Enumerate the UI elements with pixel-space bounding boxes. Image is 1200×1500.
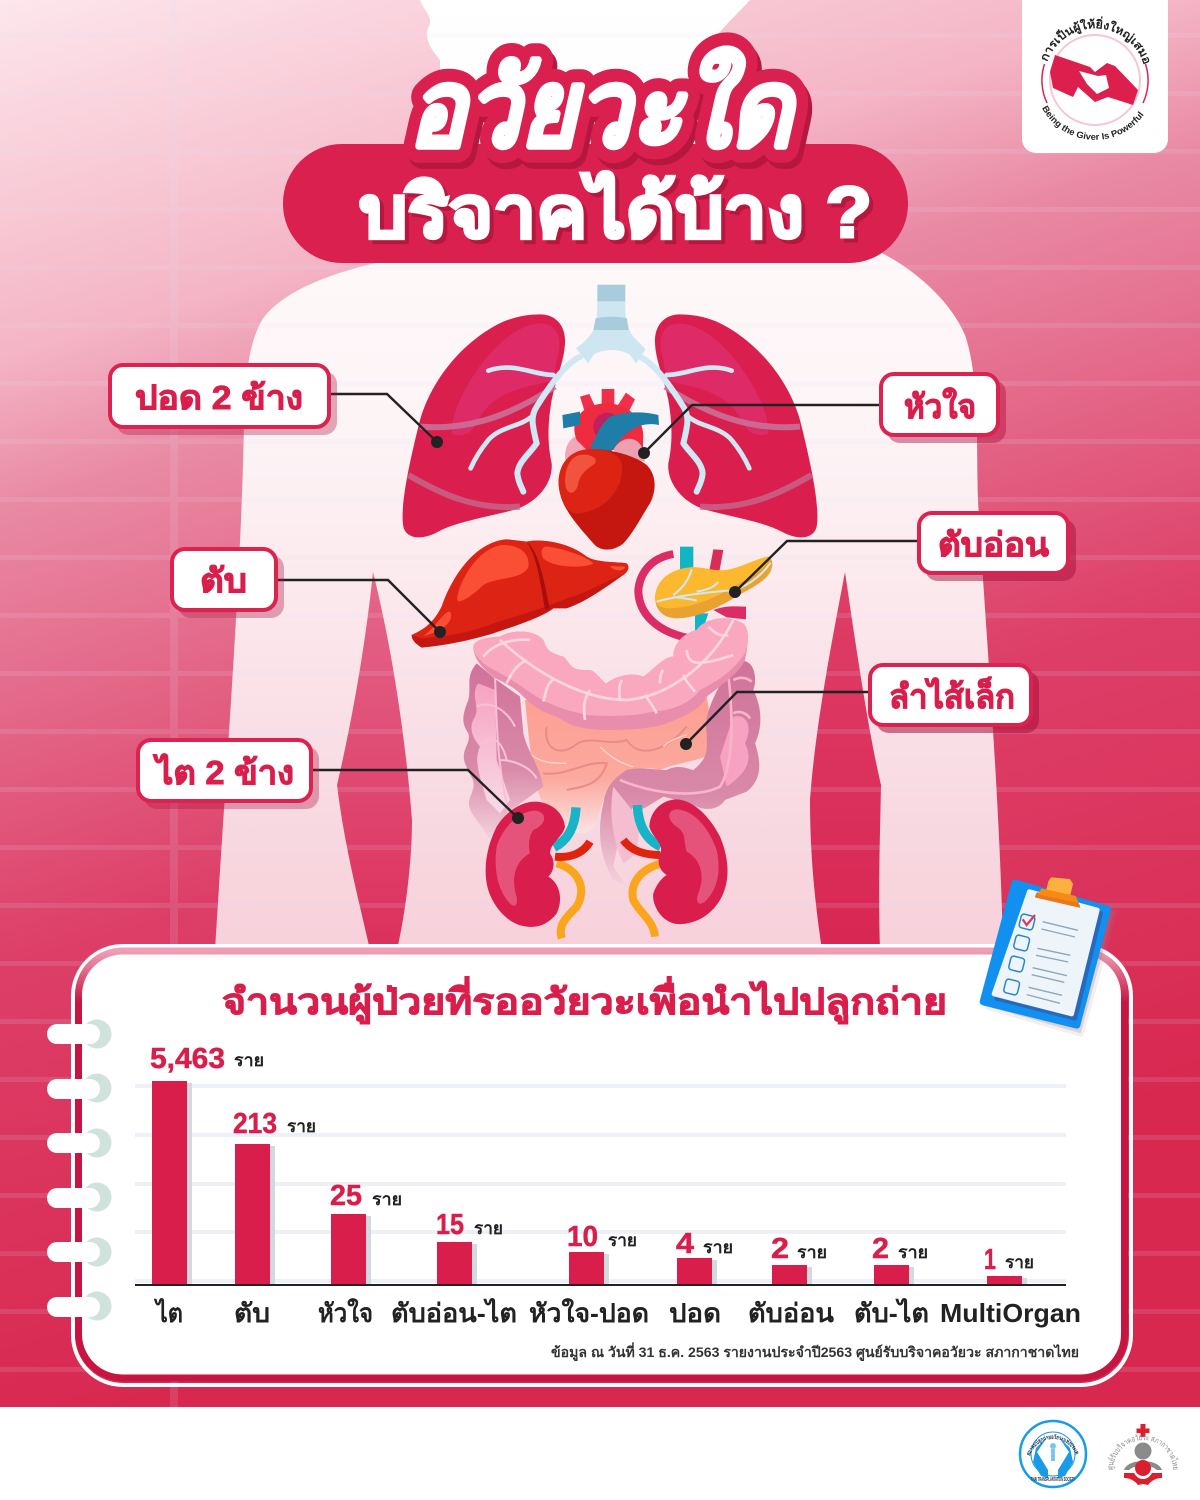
value labels: ราย (474, 1219, 503, 1238)
label: small intestine (870, 665, 1039, 733)
value labels: 1 (984, 1244, 996, 1276)
label: liver (172, 549, 284, 618)
label: lungs (110, 365, 337, 435)
logo: organ donation centre (1108, 1424, 1178, 1485)
transverse colon (473, 618, 748, 730)
organ: kidneys (486, 799, 728, 938)
value labels: ราย (1005, 1253, 1034, 1272)
right side colon (600, 661, 760, 887)
category labels: ตับอ่อน (748, 1298, 834, 1328)
value labels: ราย (234, 1051, 264, 1070)
right lung (640, 314, 817, 537)
title pill (283, 144, 908, 263)
category labels: ตับอ่อน-ไต (391, 1297, 517, 1328)
chart title: จำนวนผู้ป่วยที่รออวัยวะเพื่อนำไปปลูกถ่าย (222, 976, 947, 1025)
logo: being the giver: Being the Giver Is Powerful (1042, 105, 1144, 140)
left kidney (486, 802, 565, 927)
label: kidneys (138, 740, 319, 809)
footer band (0, 1407, 1200, 1500)
title line 2: บริจาคได้บ้าง ? (363, 174, 876, 257)
right arm gap (810, 572, 881, 950)
category labels (153, 1297, 1081, 1328)
label: liver: ตับ (200, 562, 247, 599)
organ: liver (412, 539, 628, 648)
value labels: ราย (287, 1117, 316, 1136)
value labels: 10 (567, 1221, 598, 1253)
label: kidneys: ไต 2 ข้าง (153, 753, 294, 791)
label: pancreas (919, 513, 1076, 581)
clipboard icon (983, 878, 1114, 1033)
category labels: หัวใจ-ปอด (529, 1298, 649, 1328)
logo: organ donation centre: ศูนย์รับบริจาคอวัยวะ สภากาชาดไทย (1108, 1434, 1178, 1470)
value labels: ราย (703, 1238, 733, 1257)
body silhouette (215, 0, 1003, 950)
category labels: หัวใจ (318, 1298, 373, 1328)
category labels: ตับ (234, 1298, 270, 1328)
bar chart (135, 1043, 1081, 1328)
trachea (576, 285, 646, 363)
right kidney (649, 799, 728, 924)
value labels: 15 (436, 1209, 464, 1241)
category labels: MultiOrgan (940, 1298, 1081, 1328)
left lung (403, 314, 580, 537)
label: heart (881, 374, 1006, 443)
value labels: ราย (372, 1190, 402, 1209)
category labels: ปอด (669, 1298, 721, 1328)
chart card (73, 946, 1131, 1385)
organ: pancreas (638, 547, 772, 639)
category labels: ตับ-ไต (854, 1297, 929, 1328)
source note: ข้อมูล ณ วันที่ 31 ธ.ค. 2563 รายงานประจำปี2563 ศูนย์รับบริจาคอวัยวะ สภากาชาดไทย (551, 1342, 1079, 1361)
spiral rings (47, 1020, 112, 1320)
label: lungs: ปอด 2 ข้าง (135, 379, 303, 416)
left ureter and vessels (554, 807, 590, 938)
value labels: 4 (676, 1228, 694, 1260)
right ureter and vessels (623, 805, 662, 937)
logo: thai transplantation society: THAI TRANSPLANTATION SOCIETY (1031, 1477, 1075, 1483)
value labels: 2 (872, 1233, 889, 1265)
label: pancreas: ตับอ่อน (938, 526, 1049, 563)
organ: heart (559, 389, 659, 550)
small intestine (525, 697, 711, 833)
label: heart: หัวใจ (904, 387, 976, 425)
callout dots (431, 436, 741, 824)
value labels: 2 (771, 1233, 789, 1265)
value labels: ราย (797, 1243, 827, 1262)
callout lines (278, 394, 917, 818)
organ: lungs and trachea (403, 285, 817, 537)
value labels (150, 1043, 1034, 1276)
title line 1: อวัยวะใด (408, 47, 797, 169)
title line 2: บริจาคได้บ้าง ? (359, 170, 872, 253)
logo: being the giver: การเป็นผู้ให้ยิ่งใหญ่เสมอ (1042, 16, 1150, 64)
logo: thai transplantation society: สมาคมปลูกถ่ายอวัยวะแห่งประเทศไทย (1027, 1434, 1078, 1456)
organ: colon and small intestine (463, 618, 760, 887)
value labels: 213 (233, 1108, 277, 1140)
value labels: 5,463 (150, 1043, 225, 1075)
value labels: 25 (330, 1180, 362, 1212)
label: small intestine: ลำไส้เล็ก (889, 676, 1015, 715)
logo: being the giver (1022, 0, 1168, 153)
title line 1: อวัยวะใด (408, 47, 797, 169)
title line 1: อวัยวะใด (412, 53, 801, 175)
left side colon (463, 663, 543, 840)
category labels: ไต (153, 1297, 183, 1328)
left arm gap (337, 572, 412, 950)
value labels: ราย (898, 1243, 928, 1262)
value labels: ราย (608, 1231, 637, 1250)
